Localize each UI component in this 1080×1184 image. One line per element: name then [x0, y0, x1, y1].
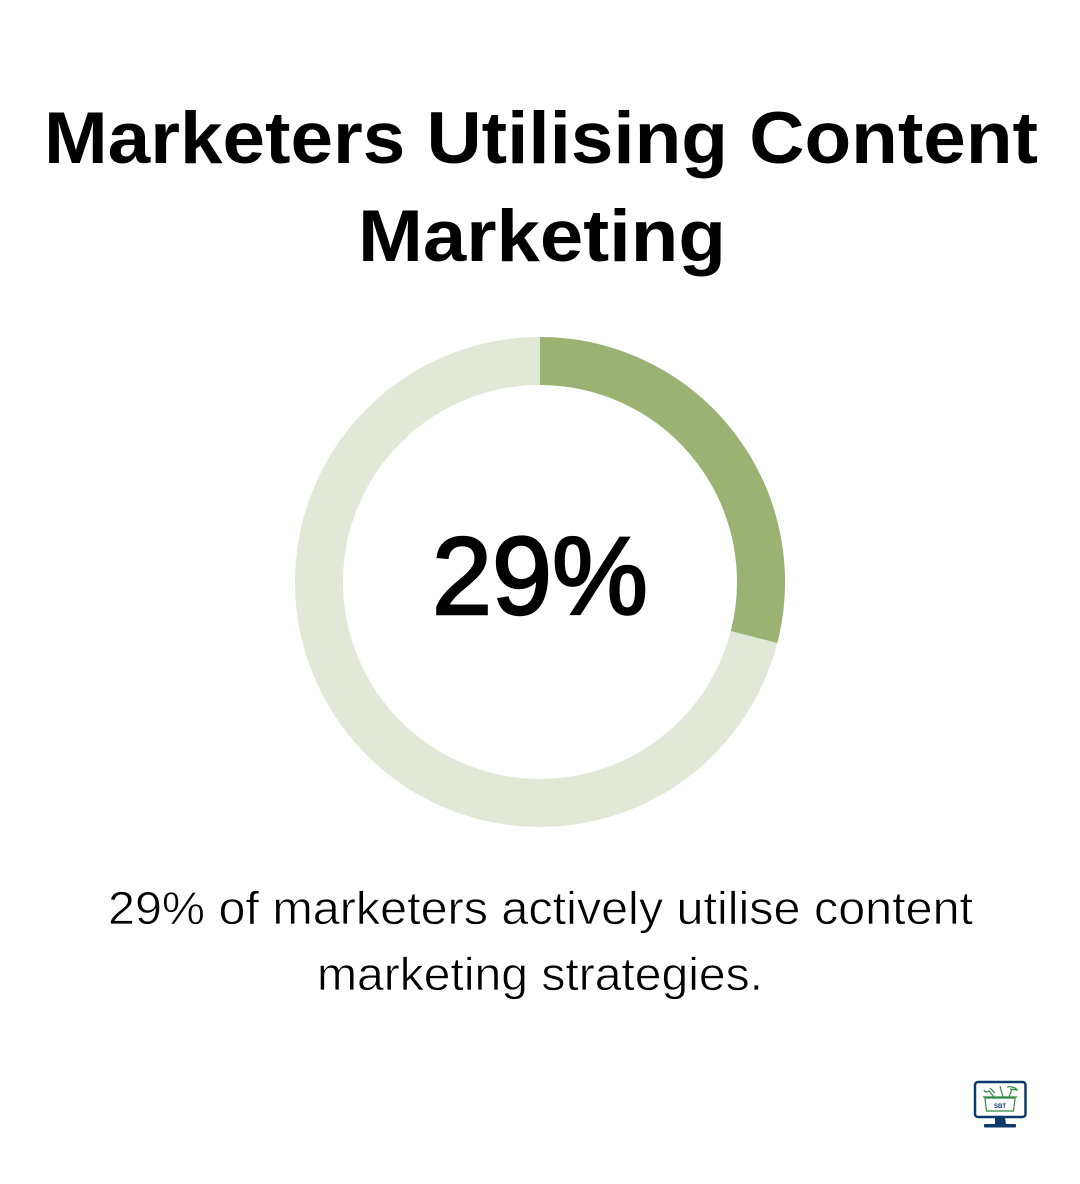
- donut chart: 29%: [319, 361, 761, 803]
- donut value: 29%: [432, 515, 648, 638]
- caption: 29% of marketers actively utilise content: [108, 882, 973, 934]
- title: Marketers Utilising Content: [44, 98, 1038, 179]
- caption: marketing strategies.: [317, 948, 763, 1000]
- icon: monitor logo with toolbox: SBT: [994, 1104, 1006, 1110]
- title: [44, 98, 1038, 277]
- icon: monitor logo with toolbox: [975, 1082, 1026, 1128]
- title: Marketing: [358, 196, 726, 277]
- caption: [108, 882, 973, 1000]
